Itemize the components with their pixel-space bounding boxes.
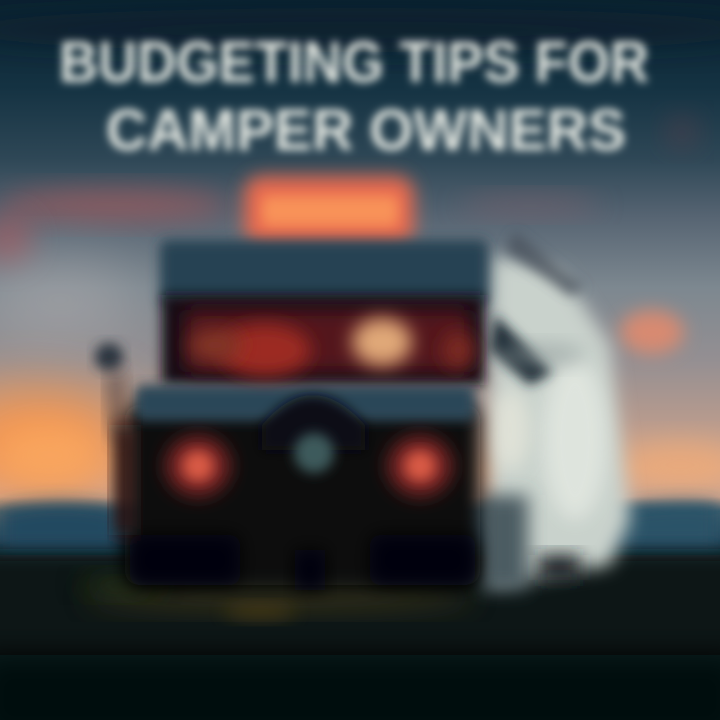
tail lights and centre emblem: [166, 433, 452, 496]
title: CAMPER OWNERS: [106, 98, 626, 163]
ground: [0, 555, 720, 720]
side mirror: [95, 343, 126, 440]
distant hills: [0, 502, 720, 550]
title: BUDGETING TIPS FOR: [59, 30, 649, 95]
camper body: [125, 240, 488, 585]
title: [59, 30, 649, 163]
roof sign: [244, 176, 414, 246]
camper window with warm interior: [185, 310, 474, 376]
wheels and shadow: [130, 535, 475, 590]
left-side body edge: [115, 425, 135, 535]
side of camper: [480, 232, 630, 590]
